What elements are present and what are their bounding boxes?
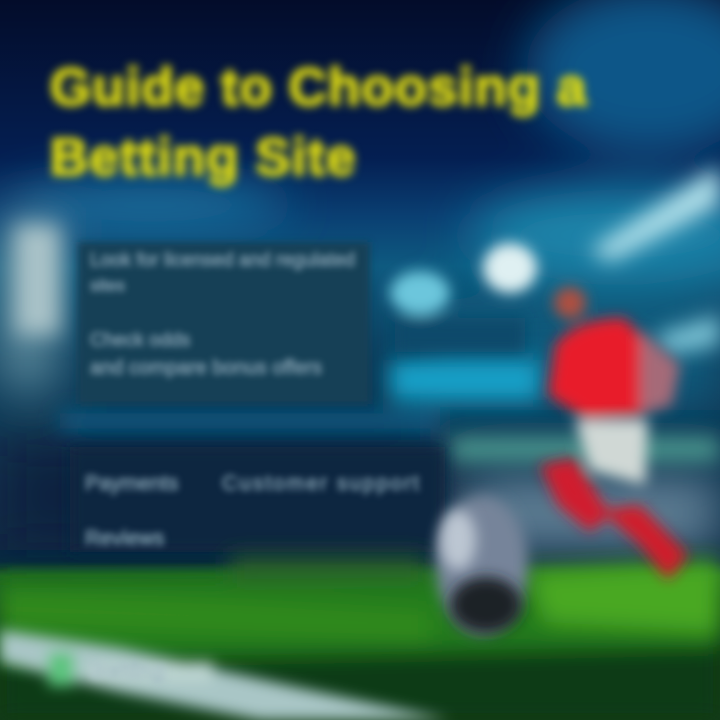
info panel text [87, 248, 358, 380]
info panel text: sites [90, 276, 125, 295]
football [436, 495, 528, 635]
lower stand text [82, 471, 422, 550]
stadium floodlights [390, 243, 537, 352]
title: Guide to Choosing a [50, 58, 587, 117]
footer logo text: Betting [90, 658, 166, 683]
title [44, 58, 594, 194]
info panel text: and compare bonus offers [90, 357, 322, 379]
white foreground streak [0, 630, 450, 720]
grass pitch [0, 556, 720, 720]
info panel [78, 242, 370, 404]
lower stand text: Customer support [222, 472, 421, 495]
lower stand band [70, 447, 445, 552]
stadium light beams [15, 165, 720, 461]
football player [540, 287, 688, 580]
lower stand text: Reviews [85, 527, 164, 550]
info panel text: Check odds [90, 330, 190, 351]
info panel text: Look for licensed and regulated [90, 250, 355, 271]
title: Betting Site [50, 128, 356, 187]
lower stand text: Payments [85, 472, 178, 495]
